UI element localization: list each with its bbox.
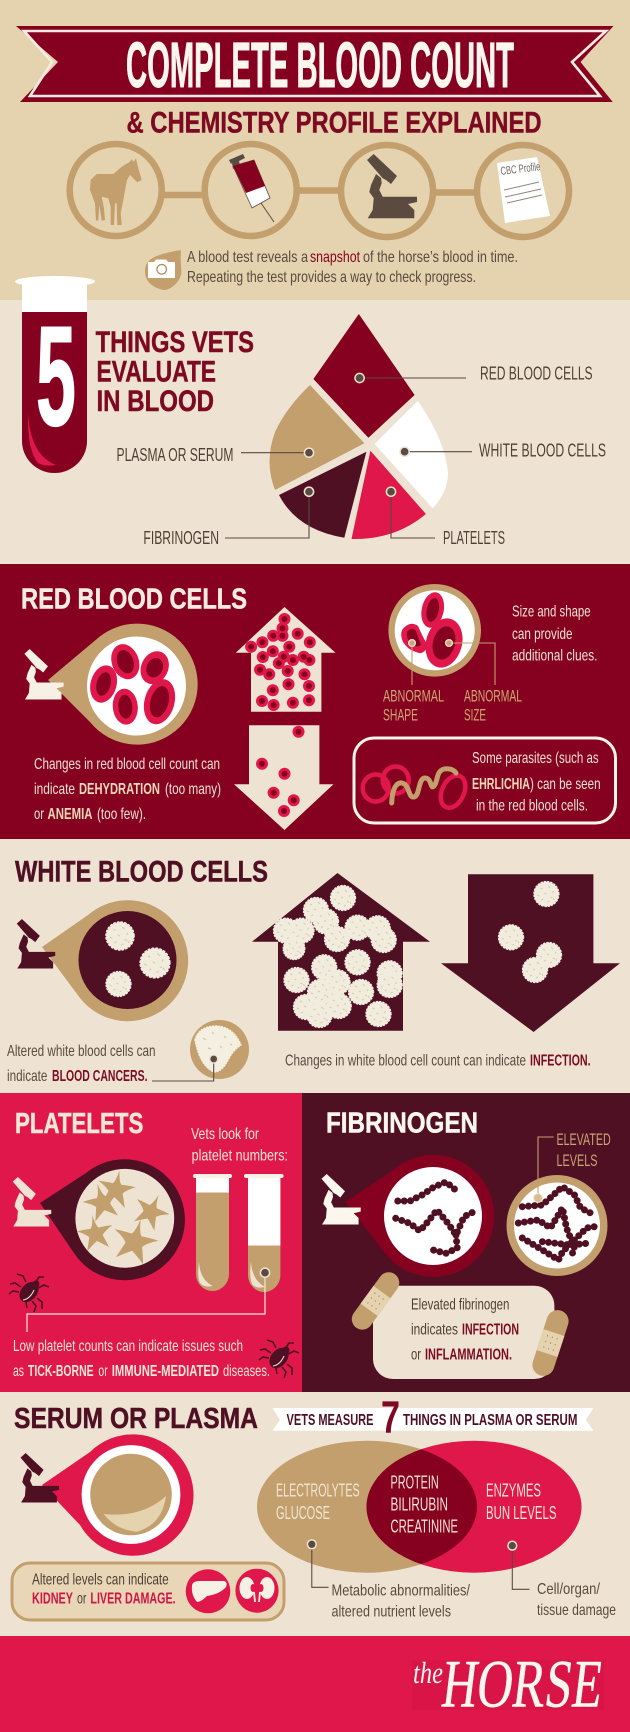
red cell count text: indicate bbox=[34, 781, 75, 798]
size and shape note: Size and shape bbox=[512, 604, 591, 621]
magnifier bubble bbox=[346, 1155, 494, 1277]
size and shape note: additional clues. bbox=[512, 648, 598, 665]
cancer leader bbox=[152, 1059, 214, 1081]
abnormal labels: ABNORMAL bbox=[464, 687, 522, 706]
down arrow with few cells bbox=[441, 874, 620, 1032]
panel: fibrinogen bbox=[302, 1093, 630, 1392]
magnifier bubble bbox=[42, 1434, 193, 1556]
icon: microscope bbox=[24, 649, 64, 699]
fibrinogen text: indicates bbox=[411, 1321, 458, 1338]
infection text: INFECTION. bbox=[530, 1053, 591, 1070]
fibrinogen text: INFLAMMATION. bbox=[425, 1346, 512, 1363]
icon: camera drop bbox=[145, 250, 181, 290]
icon: CBC document bbox=[497, 157, 550, 223]
process connectors and rings bbox=[70, 144, 569, 237]
document title: CBC Profile bbox=[500, 161, 541, 178]
red cell count text: ANEMIA bbox=[48, 806, 93, 823]
panel: platelets bbox=[0, 1093, 302, 1392]
venn captions: Metabolic abnormalities/ bbox=[332, 1583, 470, 1600]
heading: white blood cells: WHITE BLOOD CELLS bbox=[15, 856, 268, 888]
heading: serum or plasma: SERUM OR PLASMA bbox=[14, 1403, 258, 1435]
cancer cell circle bbox=[152, 1020, 249, 1081]
kidney and liver callout: or bbox=[77, 1590, 87, 1607]
snapshot text: of the horse’s blood in time. bbox=[363, 249, 518, 266]
red cell count text: or bbox=[34, 806, 44, 823]
segment: white blood cells bbox=[374, 401, 448, 508]
magnifier bubble bbox=[42, 900, 188, 1021]
icon: kidneys bbox=[235, 1569, 279, 1613]
icon: microscope bbox=[21, 1453, 59, 1502]
heading: red blood cells: RED BLOOD CELLS bbox=[21, 583, 247, 615]
venn captions: altered nutrient levels bbox=[332, 1604, 451, 1621]
marker dots bbox=[304, 373, 409, 496]
panel: footer bbox=[0, 1636, 630, 1732]
snapshot text: Repeating the test provides a way to check progress. bbox=[187, 269, 476, 286]
kidney and liver callout: LIVER DAMAGE. bbox=[90, 1590, 176, 1607]
parasite text: EHRLICHIA bbox=[472, 776, 530, 793]
blood cancers text: indicate bbox=[7, 1068, 47, 1085]
heading: things vets evaluate: IN BLOOD bbox=[96, 385, 214, 418]
low platelet text: or bbox=[98, 1363, 108, 1380]
blood cancers text bbox=[7, 1043, 156, 1085]
infection text: Changes in white blood cell count can indicate bbox=[285, 1053, 526, 1070]
elevated fibrinogen circle bbox=[506, 1137, 608, 1276]
low platelet text bbox=[13, 1338, 270, 1380]
drop labels bbox=[116, 362, 606, 548]
size and shape note: can provide bbox=[512, 626, 573, 643]
drop labels: PLASMA OR SERUM bbox=[116, 444, 234, 465]
icon: parasite and cells bbox=[363, 766, 470, 812]
panel: white blood cells bbox=[0, 839, 630, 1093]
icon: liver bbox=[186, 1569, 230, 1613]
icon: microscope bbox=[367, 154, 417, 218]
drop labels: PLATELETS bbox=[443, 527, 505, 548]
fibrinogen text: or bbox=[411, 1346, 421, 1363]
venn text: GLUCOSE bbox=[276, 1503, 330, 1523]
venn leaders bbox=[312, 1544, 530, 1589]
kidney and liver callout: KIDNEY bbox=[32, 1590, 73, 1607]
venn text bbox=[276, 1472, 556, 1537]
blood cancers text: Altered white blood cells can bbox=[7, 1043, 156, 1060]
abnormal cells circle bbox=[388, 584, 495, 685]
numeral 7: 7 bbox=[381, 1392, 400, 1443]
icon: microscope bbox=[321, 1174, 361, 1224]
venn text: PROTEIN bbox=[390, 1472, 439, 1492]
blood cancers text: BLOOD CANCERS. bbox=[52, 1068, 148, 1085]
elevated leader bbox=[538, 1137, 554, 1198]
title ribbon bbox=[16, 26, 614, 102]
panel: header bbox=[0, 0, 630, 300]
drop labels: FIBRINOGEN bbox=[143, 527, 219, 548]
heading: fibrinogen: FIBRINOGEN bbox=[326, 1107, 478, 1139]
icon: horse bbox=[90, 158, 142, 225]
parasite text: in the red blood cells. bbox=[476, 798, 588, 815]
low platelet text: as bbox=[13, 1363, 24, 1380]
up arrow with many cells bbox=[236, 607, 336, 712]
up arrow with many cells bbox=[252, 873, 430, 1031]
venn text: BILIRUBIN bbox=[390, 1495, 448, 1515]
tube marker line bbox=[27, 1273, 265, 1332]
heading: things vets evaluate: EVALUATE bbox=[96, 356, 216, 389]
seven things ribbon: VETS MEASURE bbox=[286, 1412, 374, 1429]
size and shape note bbox=[512, 604, 598, 665]
red cell count text: DEHYDRATION bbox=[79, 781, 160, 798]
low platelet text: diseases. bbox=[223, 1363, 270, 1380]
red cell count text: Changes in red blood cell count can bbox=[34, 756, 220, 773]
panel: serum or plasma bbox=[10, 1401, 616, 1622]
abnormal labels: SHAPE bbox=[383, 706, 418, 725]
venn text: BUN LEVELS bbox=[486, 1503, 556, 1523]
elevated levels label bbox=[556, 1130, 611, 1170]
icon: microscope bbox=[17, 919, 55, 968]
segment: platelets bbox=[352, 451, 426, 539]
abnormal labels: ABNORMAL bbox=[383, 687, 444, 706]
numeral 5: 5 bbox=[36, 297, 76, 456]
panel: 5 things vets evaluate bbox=[0, 276, 630, 564]
snapshot text: snapshot bbox=[310, 249, 360, 266]
red cell count text bbox=[34, 756, 221, 823]
snapshot text: A blood test reveals a bbox=[187, 249, 308, 266]
abnormal leaders bbox=[412, 643, 495, 685]
icon: tick bbox=[259, 1340, 299, 1378]
logo: the Horse: the bbox=[413, 1655, 443, 1690]
segment: plasma or serum bbox=[270, 385, 364, 490]
red cell count text: (too few). bbox=[97, 806, 146, 823]
venn captions bbox=[332, 1581, 616, 1621]
vets look text bbox=[191, 1126, 288, 1165]
leader lines bbox=[225, 378, 472, 538]
elevated levels label: LEVELS bbox=[556, 1151, 598, 1170]
fibrinogen text bbox=[411, 1296, 519, 1363]
venn captions: Cell/organ/ bbox=[537, 1581, 600, 1598]
heading: things vets evaluate bbox=[96, 326, 254, 418]
vets look text: platelet numbers: bbox=[192, 1148, 288, 1165]
seven things ribbon bbox=[272, 1392, 593, 1443]
vets look text: Vets look for bbox=[191, 1126, 260, 1143]
snapshot text bbox=[187, 249, 518, 286]
icon: test tube with 5 bbox=[15, 276, 95, 473]
fibrinogen text: Elevated fibrinogen bbox=[411, 1296, 509, 1313]
heading: things vets evaluate: THINGS VETS bbox=[96, 326, 254, 359]
fibrinogen card bbox=[348, 1268, 571, 1379]
test tube: normal bbox=[193, 1174, 232, 1291]
low platelet text: TICK-BORNE bbox=[28, 1363, 94, 1380]
segment: red blood cells bbox=[313, 314, 415, 438]
test tube: low bbox=[27, 1174, 284, 1332]
down arrow with few cells bbox=[234, 725, 334, 830]
icon: tick bbox=[9, 1274, 49, 1312]
drop chart bbox=[225, 314, 472, 539]
heading: platelets: PLATELETS bbox=[15, 1108, 143, 1140]
parasite text bbox=[472, 750, 601, 815]
icon: bandage bbox=[348, 1268, 403, 1334]
abnormal labels: SIZE bbox=[464, 706, 486, 725]
parasite callout bbox=[354, 738, 616, 823]
parasite text: ) can be seen bbox=[530, 776, 601, 793]
magnifier bubble bbox=[48, 624, 198, 745]
icon: bandage bbox=[530, 1307, 571, 1379]
venn text: ENZYMES bbox=[486, 1481, 541, 1501]
low platelet text: IMMUNE-MEDIATED bbox=[112, 1363, 219, 1380]
icon: syringe bbox=[229, 154, 274, 222]
venn text: CREATININE bbox=[390, 1517, 458, 1537]
panel: red blood cells bbox=[0, 564, 630, 839]
venn text: ELECTROLYTES bbox=[276, 1481, 360, 1501]
segment: fibrinogen bbox=[279, 452, 366, 538]
kidney and liver callout bbox=[12, 1563, 284, 1620]
fibrinogen text: INFECTION bbox=[462, 1321, 519, 1338]
low platelet text: Low platelet counts can indicate issues such bbox=[13, 1338, 243, 1355]
venn diagram bbox=[257, 1441, 582, 1589]
icon: microscope bbox=[13, 1177, 51, 1226]
abnormal labels bbox=[383, 687, 522, 725]
kidney and liver callout: Altered levels can indicate bbox=[32, 1571, 169, 1588]
magnifier bubble bbox=[40, 1159, 185, 1280]
red cell count text: (too many) bbox=[165, 781, 221, 798]
